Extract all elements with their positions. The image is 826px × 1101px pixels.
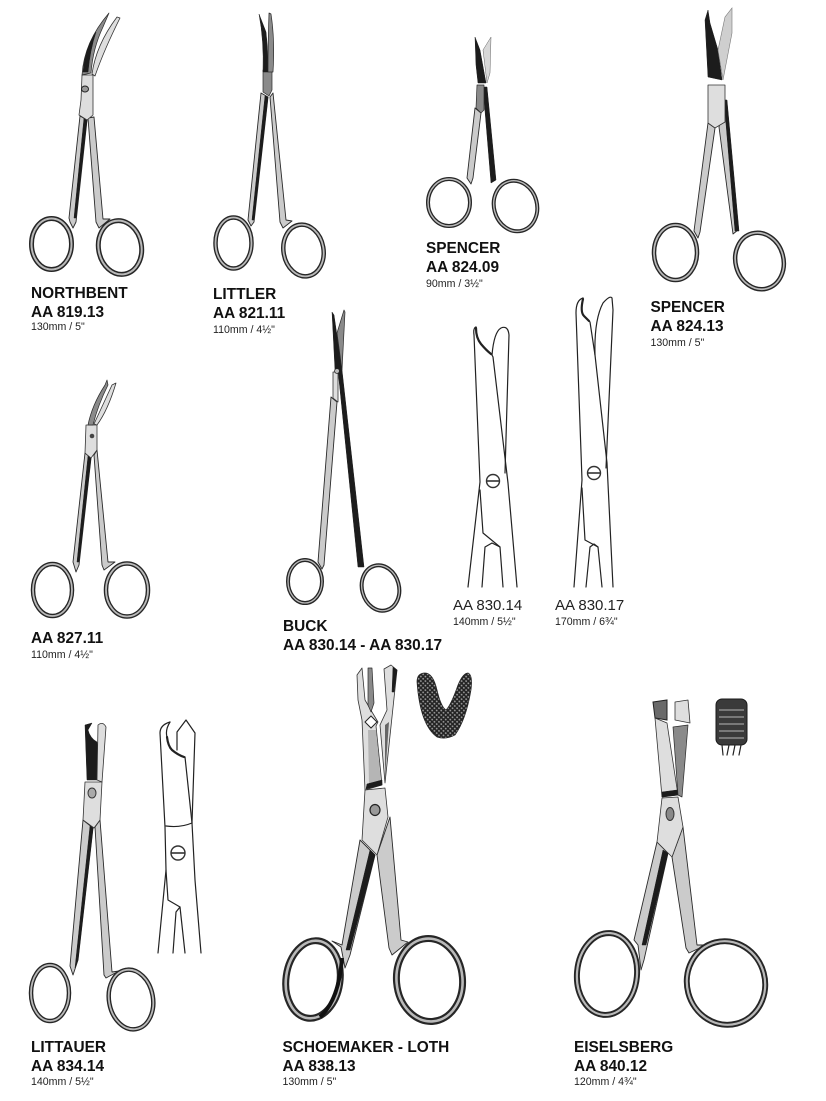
label: Spencer 130mm: [650, 299, 725, 349]
label: AA 827.11: AA 827.11: [31, 630, 104, 647]
instrument: Spencer 90mm scissors: [428, 37, 543, 236]
label: Spencer 130mm: AA 824.13: [650, 318, 724, 335]
label: Buck: BUCK: [283, 618, 327, 635]
label: Northbent: NORTHBENT: [31, 285, 128, 302]
label: Eiselsberg: EISELSBERG: [574, 1039, 673, 1056]
label: AA 827.11: 110mm / 4½": [31, 649, 93, 661]
label: Northbent: AA 819.13: [31, 304, 104, 321]
label: AA 830.14: AA 830.14: [453, 597, 522, 614]
label: Schoemaker-Loth: [282, 1039, 449, 1088]
instrument: Littauer scissors: [31, 723, 158, 1033]
label: Littler: LITTLER: [213, 286, 276, 303]
icon: serrated U-shaped jaw detail: [417, 673, 472, 738]
line drawing: AA 830.14 blades: [468, 327, 517, 587]
label: Buck: [283, 618, 442, 654]
label: Littauer: 140mm / 5½": [31, 1076, 94, 1088]
instrument: Littler scissors: [216, 13, 328, 280]
label: Littler: [213, 286, 286, 336]
label: Buck: AA 830.14 - AA 830.17: [283, 637, 442, 654]
screw: Littauer: [171, 846, 185, 860]
label: Schoemaker-Loth: SCHOEMAKER - LOTH: [282, 1039, 449, 1056]
label: Spencer 90mm: SPENCER: [426, 240, 500, 257]
label: Eiselsberg: AA 840.12: [574, 1058, 647, 1075]
instrument: Schoemaker-Loth scissors: [281, 665, 466, 1024]
label: AA 830.14: [453, 597, 522, 628]
line drawing: Littauer blades: [158, 720, 201, 953]
label: Spencer 130mm: 130mm / 5": [650, 337, 705, 349]
label: Eiselsberg: [574, 1039, 673, 1088]
instrument: Eiselsberg scissors: [574, 700, 775, 1034]
label: AA 830.17: [555, 597, 624, 628]
label: Northbent: [31, 285, 128, 333]
label: Schoemaker-Loth: 130mm / 5": [282, 1076, 337, 1088]
label: Littauer: [31, 1039, 106, 1088]
label: Spencer 90mm: [426, 240, 500, 290]
label: Northbent: 130mm / 5": [31, 321, 85, 333]
label: Eiselsberg: 120mm / 4¾": [574, 1076, 637, 1088]
label: Spencer 90mm: AA 824.09: [426, 259, 499, 276]
line drawing: AA 830.17 blades: [574, 297, 613, 587]
label: Littler: AA 821.11: [213, 305, 286, 322]
label: AA 830.17: 170mm / 6¾": [555, 616, 618, 628]
label: Littler: 110mm / 4½": [213, 324, 275, 336]
instrument: Spencer 130mm scissors: [654, 8, 790, 295]
label: Littauer: AA 834.14: [31, 1058, 104, 1075]
instrument: Northbent scissors: [32, 13, 146, 278]
label: Schoemaker-Loth: AA 838.13: [282, 1058, 356, 1075]
instrument: Buck scissors: [288, 310, 404, 615]
label: AA 827.11: [31, 630, 104, 661]
label: Spencer 90mm: 90mm / 3½": [426, 278, 483, 290]
label: AA 830.14: 140mm / 5½": [453, 616, 516, 628]
label: Spencer 130mm: SPENCER: [650, 299, 725, 316]
label: AA 830.17: AA 830.17: [555, 597, 624, 614]
screw: AA 830.14: [486, 474, 500, 488]
label: Littauer: LITTAUER: [31, 1039, 106, 1056]
instrument: AA 827.11 scissors: [33, 380, 148, 616]
icon: rectangular jaw detail: [716, 699, 747, 755]
screw: AA 830.17: [588, 466, 600, 480]
